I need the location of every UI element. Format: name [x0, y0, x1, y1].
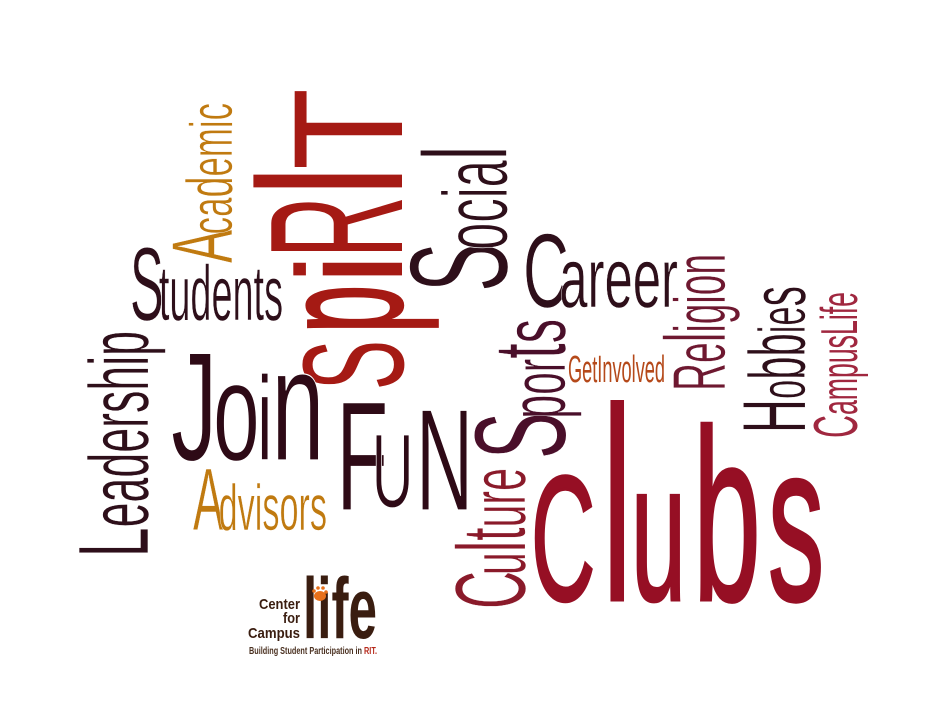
word: Culture: Culture	[435, 468, 547, 609]
word: Advisors: Advisors	[193, 450, 327, 549]
word: Clubs: s	[768, 396, 824, 648]
word: Spirit: T	[262, 88, 436, 170]
word: Clubs: l	[602, 352, 632, 658]
word: Career: Career	[523, 213, 678, 330]
word cloud: GetInvolved	[568, 349, 665, 391]
word: Join: o	[213, 334, 260, 490]
word: Join: n	[271, 316, 325, 494]
word: Join: J	[171, 321, 217, 494]
logo text: Center for Campus	[248, 596, 300, 642]
word: Leadership: Leadership	[58, 331, 170, 557]
word: Clubs: C	[531, 439, 595, 638]
logo wordmark: life: life	[303, 561, 377, 657]
word: CampusLife: CampusLife	[802, 292, 871, 438]
logo text: Center for Campus: Campus	[248, 625, 300, 642]
logo text: Center for Campus: for	[283, 610, 300, 627]
logo: Center for Campus Life	[248, 561, 377, 657]
word: Clubs: u	[631, 422, 686, 643]
word: Fun: N	[416, 379, 473, 541]
word: Social: Social	[380, 146, 537, 292]
word: Hobbies: Hobbies	[725, 286, 825, 433]
logo text: Center for Campus: Center	[259, 596, 300, 613]
word: Students: Students	[130, 227, 283, 343]
word: Spirit: S	[273, 340, 434, 390]
word: Clubs: b	[693, 379, 761, 652]
logo tagline: Building Student Participation in RIT.	[249, 646, 377, 657]
icon: orange paw	[312, 586, 328, 601]
word: Academic: Academic	[155, 103, 251, 263]
word: Spirit: I	[206, 162, 448, 200]
word: Join: i	[257, 351, 273, 485]
word: Religion: Religion	[648, 254, 744, 391]
word: Fun: U	[372, 412, 413, 529]
word: Spirit: i	[266, 253, 434, 285]
word: Fun: F	[336, 369, 388, 543]
word: Spirit	[206, 88, 448, 390]
word: Sports: Sports	[447, 319, 593, 459]
word: Spirit: p	[244, 285, 439, 333]
word: Spirit: R	[231, 196, 443, 258]
